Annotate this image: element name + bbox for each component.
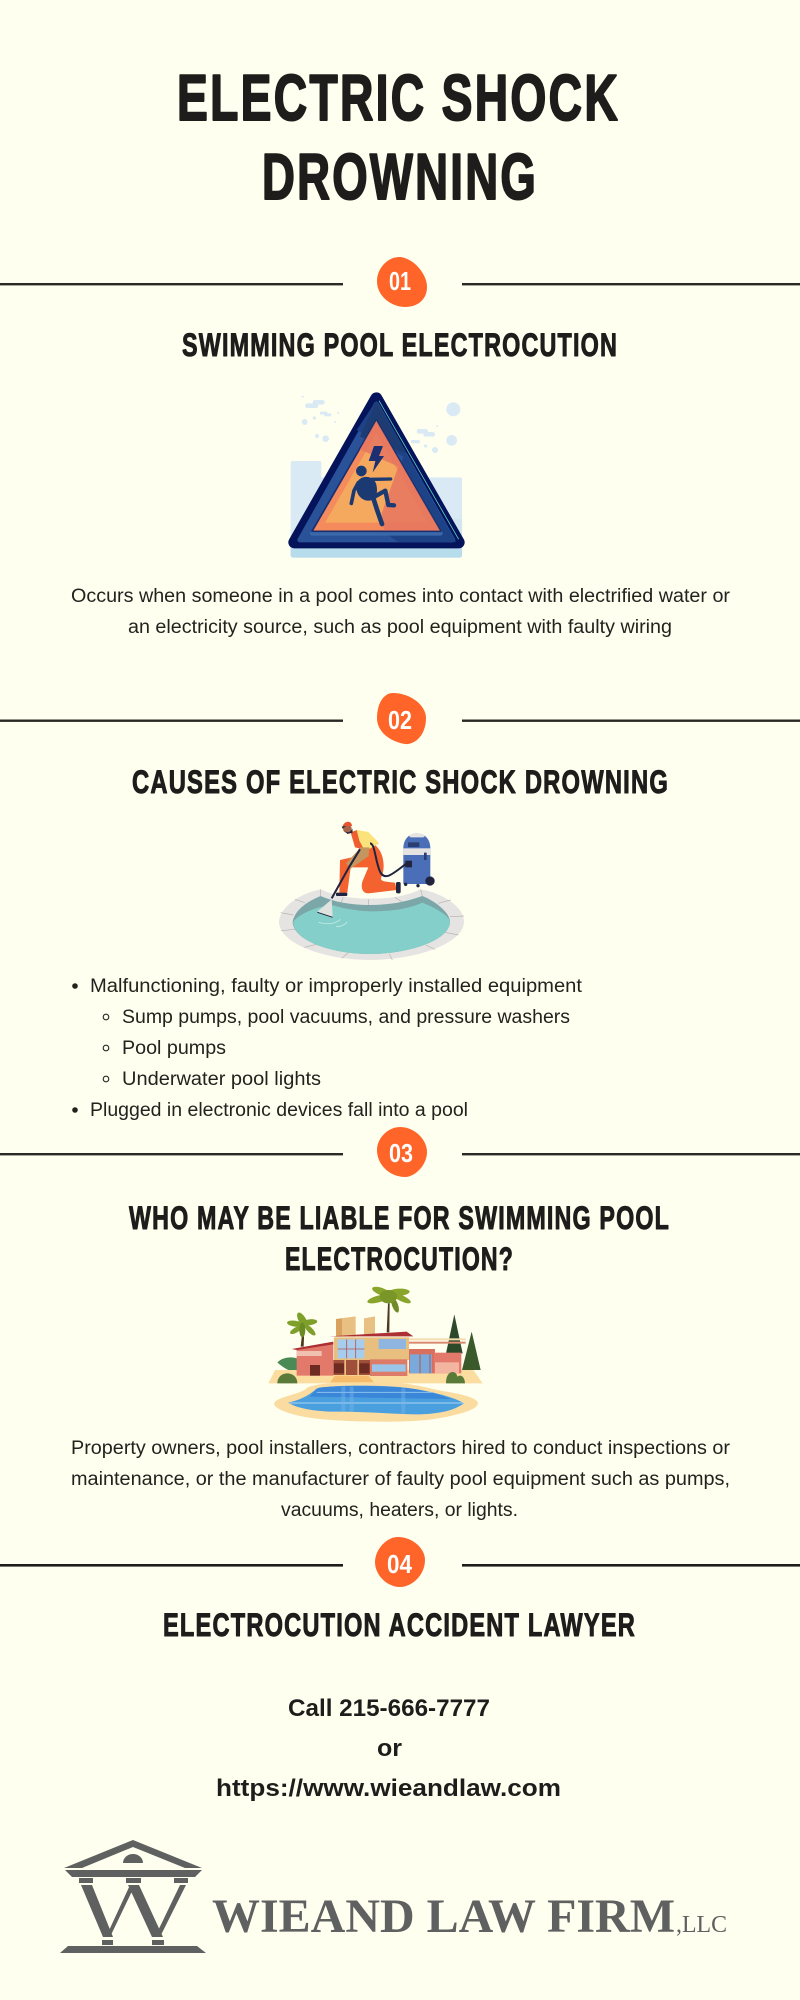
text: section 1 description: Occurs when someone in a pool comes into contact with electrified water or — [71, 586, 731, 607]
worker — [336, 822, 401, 896]
title: DROWNING — [262, 140, 538, 213]
title: ELECTRIC SHOCK — [177, 61, 620, 134]
list: causes: Sump pumps, pool vacuums, and pressure washers — [122, 1007, 570, 1028]
list: causes: Pool pumps — [122, 1038, 226, 1059]
icon: courthouse W emblem — [60, 1840, 206, 1953]
illustration: house with swimming pool — [268, 1285, 483, 1422]
section 03 divider: 03 — [389, 1138, 413, 1168]
palm trees — [287, 1285, 412, 1347]
section 04 divider: 04 — [387, 1549, 412, 1579]
text: section 3 description — [71, 1438, 731, 1521]
section 01 divider: 01 — [389, 266, 411, 296]
icon: falling person — [351, 466, 394, 524]
logo wordmark: ,LLC — [676, 1912, 727, 1938]
logo: Wieand Law Firm — [60, 1840, 727, 1953]
list: causes: Underwater pool lights — [122, 1069, 321, 1090]
pool — [274, 1382, 478, 1422]
text: section 1 description: an electricity source, such as pool equipment with faulty wiring — [128, 617, 672, 638]
title — [177, 61, 620, 213]
illustration: worker vacuuming a pool — [279, 822, 464, 960]
contact details: or — [377, 1735, 402, 1762]
vacuum cleaner — [403, 833, 435, 887]
terrace — [330, 1376, 374, 1382]
icon: lightning bolt — [369, 446, 384, 472]
contact details — [216, 1695, 561, 1802]
logo wordmark: WIEAND LAW FIRM — [212, 1890, 675, 1943]
contact details: Call 215-666-7777 — [288, 1695, 490, 1722]
text: section 1 description — [71, 586, 731, 638]
text: section 3 description: vacuums, heaters, or lights. — [281, 1500, 518, 1521]
heading: swimming pool electrocution: SWIMMING POOL ELECTROCUTION — [182, 327, 618, 363]
list: causes: Malfunctioning, faulty or improperly installed equipment — [90, 976, 583, 997]
heading: electrocution accident lawyer: ELECTROCUTION ACCIDENT LAWYER — [163, 1607, 636, 1643]
section 04 divider — [0, 1537, 800, 1587]
icon: electric hazard warning triangle — [291, 396, 462, 558]
contact details: https://www.wieandlaw.com — [216, 1775, 561, 1802]
section 02 divider: 02 — [388, 705, 412, 735]
section 02 divider — [0, 693, 800, 744]
pool — [279, 889, 464, 960]
garden plant — [277, 1357, 297, 1370]
section 03 divider — [0, 1127, 800, 1177]
bushes — [277, 1372, 465, 1383]
text: section 3 description: maintenance, or the manufacturer of faulty pool equipment such as pumps, — [71, 1469, 730, 1490]
hose and nozzle — [317, 843, 407, 917]
list: causes: Plugged in electronic devices fall into a pool — [90, 1100, 468, 1121]
heading: who may be liable: ELECTROCUTION? — [285, 1241, 514, 1277]
section 01 divider — [0, 257, 800, 307]
evergreen trees — [446, 1314, 481, 1370]
text: section 3 description: Property owners, pool installers, contractors hired to conduct inspections or — [71, 1438, 731, 1459]
building — [292, 1316, 466, 1376]
heading: who may be liable — [129, 1200, 670, 1277]
list: causes — [72, 976, 583, 1121]
